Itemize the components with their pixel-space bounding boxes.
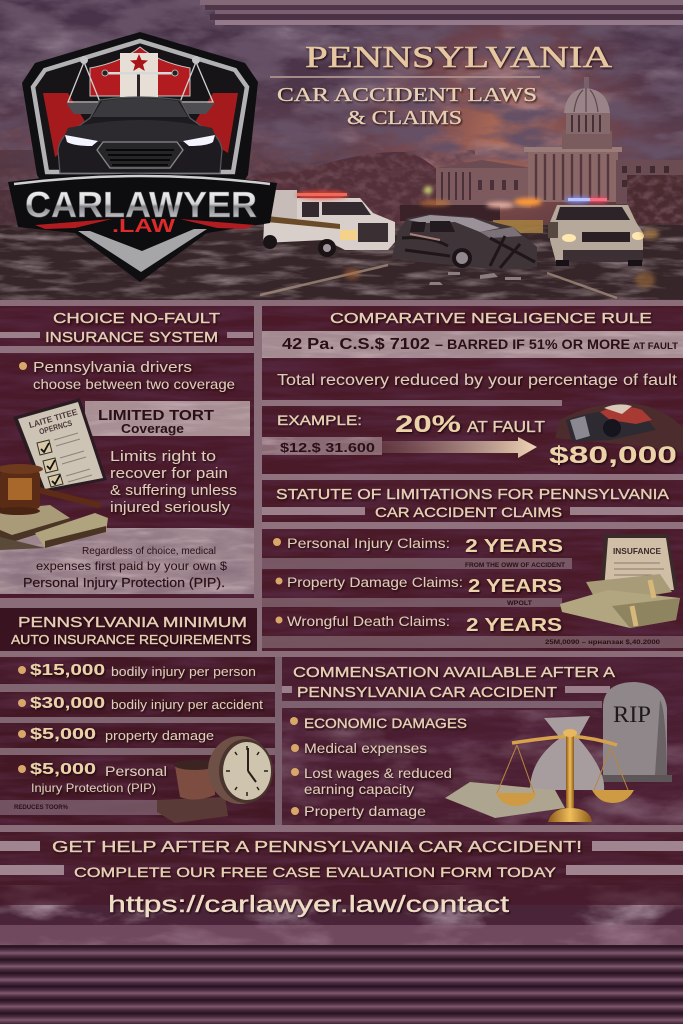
- shield red panels: [43, 93, 238, 157]
- row: 30000: bodily injury per accident: [111, 698, 264, 712]
- light note block: expenses first paid by your own $: [36, 559, 227, 573]
- heading: COMMENSATION AVAILABLE AFTER A: [293, 665, 615, 681]
- car: [58, 97, 222, 173]
- heading: [45, 311, 220, 346]
- light note block: [0, 528, 254, 594]
- row: 5000 pip: [14, 761, 167, 811]
- example: EXAMPLE:: [277, 412, 362, 428]
- bullet text: Pennsylvania drivers: [33, 359, 192, 376]
- limited tort box: Coverage: [121, 422, 184, 436]
- bullet text: choose between two coverage: [33, 376, 235, 392]
- example: $80,000: [549, 442, 677, 469]
- row: 5000 pip: Personal: [105, 764, 167, 779]
- row: 5000 property: [18, 726, 214, 743]
- limits text: [110, 449, 237, 516]
- row: wrongful death: [276, 614, 660, 646]
- row: 15000: [18, 662, 256, 679]
- bullet text: [19, 359, 235, 392]
- panel: call to action: [0, 832, 683, 892]
- icon: cash stack: [445, 782, 565, 818]
- title: CAR ACCIDENT LAWS: [277, 84, 537, 106]
- icon: gavel and money: [0, 464, 108, 550]
- row: personal injury: 2 YEARS: [465, 536, 563, 556]
- heading: minimum requirements: [0, 608, 257, 651]
- banner: [8, 174, 277, 262]
- heading: PENNSYLVANIA CAR ACCIDENT: [297, 685, 557, 701]
- vertical divider: [275, 657, 282, 825]
- row: 15000: $15,000: [30, 662, 105, 679]
- header scene: [0, 0, 683, 300]
- subheading: COMPLETE OUR FREE CASE EVALUATION FORM TODAY: [74, 865, 556, 880]
- heading: [293, 665, 615, 701]
- row: property damage: [276, 575, 562, 607]
- row: personal injury: [273, 536, 565, 569]
- heading: minimum requirements: AUTO INSURANCE REQUIREMENTS: [11, 633, 251, 647]
- icon: gold scales: [496, 729, 634, 822]
- damages list: earning capacity: [304, 782, 414, 797]
- row: personal injury: FROM THE OWW OF ACCIDENT: [465, 563, 565, 569]
- row: 5000 property: property damage: [105, 728, 214, 743]
- example: AT FAULT: [467, 419, 546, 436]
- icon: clipboard checklist: [13, 398, 107, 493]
- statute band: [262, 331, 683, 358]
- rule text: Total recovery reduced by your percentage of fault: [277, 372, 678, 389]
- road reflections: [493, 220, 543, 233]
- top stripes: [200, 0, 683, 25]
- icon: damaged car: [555, 403, 683, 452]
- heading: COMPARATIVE NEGLIGENCE RULE: [330, 310, 652, 327]
- row: 30000: $30,000: [30, 695, 105, 712]
- row: property damage: WPOLT: [507, 601, 532, 607]
- emergency lights: [419, 186, 542, 208]
- title: PENNSYLVANIA: [305, 39, 613, 74]
- icon: insurance document and money: [560, 534, 680, 628]
- capitol building: [436, 77, 683, 208]
- logo: CarLawyer.law shield: .LAW: [112, 216, 175, 236]
- statute band: AT FAULT: [633, 341, 678, 352]
- statute band: 42 Pa. C.S.$ 7102: [282, 336, 430, 353]
- panel: compensation: [282, 657, 683, 825]
- road: [0, 225, 683, 300]
- row: 15000: bodily injury per person: [111, 665, 256, 679]
- arrow: [382, 437, 537, 458]
- damages list: ECONOMIC DAMAGES: [304, 715, 467, 731]
- row: property damage: Property Damage Claims:: [287, 575, 463, 590]
- panel: minimum coverage list: [0, 657, 275, 825]
- limited tort box: [85, 401, 250, 436]
- icon: money bag: [530, 716, 604, 790]
- limits text: recover for pain: [110, 466, 228, 482]
- logo: CarLawyer.law shield: [8, 32, 277, 282]
- row: 5000 pip: REDUCES TOOR%: [14, 804, 68, 811]
- row: property damage: 2 YEARS: [468, 576, 562, 596]
- heading: GET HELP AFTER A PENNSYLVANIA CAR ACCIDENT!: [52, 839, 582, 856]
- url: https://carlawyer.law/contact: [108, 891, 510, 917]
- hills: [175, 152, 470, 240]
- panel: choice no-fault: [0, 300, 254, 598]
- row: wrongful death: 25M,0090 – нрнanзaк $,40.2000: [545, 639, 660, 646]
- example: 20%: [395, 411, 461, 438]
- heading: CAR ACCIDENT CLAIMS: [375, 504, 562, 520]
- example: $12.$ 31.600: [280, 441, 375, 455]
- logo: CarLawyer.law shield: CARLAWYER: [25, 184, 257, 225]
- row: wrongful death: Wrongful Death Claims:: [287, 614, 450, 629]
- heading: CHOICE NO-FAULT: [53, 311, 220, 327]
- light note block: Regardless of choice, medical: [82, 545, 216, 557]
- title: [270, 39, 613, 129]
- limits text: injured seriously: [110, 500, 231, 516]
- crashed car: [392, 214, 537, 270]
- example: [262, 403, 683, 469]
- limits text: & suffering unless: [110, 483, 237, 499]
- heading: [262, 487, 683, 520]
- heading: INSURANCE SYSTEM: [45, 330, 218, 346]
- row: 5000 pip: $5,000: [30, 761, 96, 778]
- icon: clipboard checklist: LAITE TITEE: [28, 407, 79, 430]
- divider strip: [0, 598, 262, 608]
- damages list: [290, 715, 467, 819]
- ambulance: [263, 190, 395, 257]
- row: 5000 property: $5,000: [30, 726, 96, 743]
- vertical divider: [254, 300, 262, 656]
- heading: STATUTE OF LIMITATIONS FOR PENNSYLVANIA: [276, 487, 669, 503]
- row: wrongful death: 2 YEARS: [466, 615, 562, 635]
- icon: insurance document and money: INSUFANCE: [613, 546, 661, 556]
- title: & CLAIMS: [347, 107, 462, 129]
- light note block: Personal Injury Protection (PIP).: [23, 576, 225, 590]
- panel: statute of limitations: [262, 487, 683, 648]
- damages list: Lost wages & reduced: [304, 766, 452, 781]
- row: 30000: [18, 695, 264, 712]
- statute band: – BARRED IF 51% OR MORE: [435, 337, 630, 352]
- trees: [627, 175, 683, 227]
- row: 5000 pip: Injury Protection (PIP): [31, 781, 156, 795]
- damages list: Medical expenses: [304, 740, 427, 756]
- limits text: Limits right to: [110, 449, 216, 465]
- rubble: [429, 272, 521, 285]
- row: personal injury: Personal Injury Claims:: [287, 536, 450, 551]
- icon: clock and cup: [157, 736, 273, 823]
- icon: clipboard checklist: OPERNCS: [38, 418, 74, 436]
- icon: RIP gravestone: [597, 682, 672, 782]
- heading: minimum requirements: PENNSYLVANIA MINIMUM: [18, 615, 247, 631]
- police truck: [548, 197, 659, 266]
- limited tort box: LIMITED TORT: [98, 407, 214, 424]
- icon: RIP gravestone: RIP: [613, 702, 651, 727]
- scales of justice: [68, 62, 213, 102]
- panel: comparative negligence: [262, 300, 683, 652]
- footer background: [0, 885, 683, 1024]
- damages list: Property damage: [304, 803, 426, 819]
